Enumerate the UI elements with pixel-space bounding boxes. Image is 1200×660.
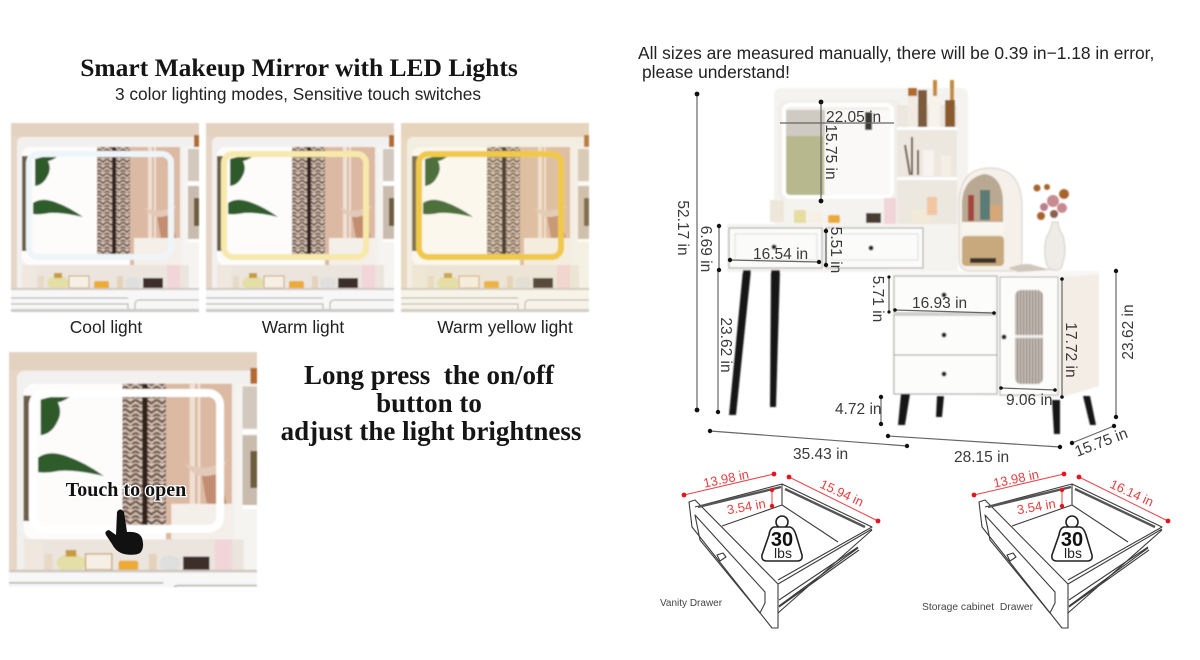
dimension labels: 35.43 in: [793, 446, 848, 463]
brightness instruction: [281, 360, 581, 446]
touch to open label: Touch to open: [66, 479, 186, 501]
photo: warm light mirror: [206, 123, 394, 312]
dimension labels: 4.72 in: [835, 401, 882, 418]
red dimensions: 15.94 in: [818, 476, 866, 509]
dimension labels: 9.06 in: [1006, 392, 1053, 409]
dimension labels: 23.62 in: [1120, 304, 1137, 360]
label: vanity drawer: Vanity Drawer: [660, 598, 723, 609]
dimension labels: 16.54 in: [753, 246, 808, 263]
dimension labels: [674, 109, 1137, 466]
vanity drawer diagram: [682, 466, 880, 628]
dimension labels: 17.72 in: [1062, 322, 1079, 378]
book on cabinet: [1008, 264, 1051, 272]
dimension labels: 52.17 in: [674, 200, 691, 256]
brightness instruction: button to: [376, 388, 482, 418]
red dimensions: 13.98 in: [702, 466, 750, 491]
furniture: vanity and storage cabinet: [727, 80, 1099, 434]
dimension end points: [695, 92, 1118, 449]
icon: 30 lbs weight: 30: [1061, 529, 1083, 551]
vanity legs: [729, 270, 780, 415]
icon: 30 lbs weight: lbs: [774, 545, 792, 561]
icon: 30 lbs weight: 30: [771, 529, 793, 551]
red dimensions: 16.14 in: [1108, 476, 1156, 509]
vanity desk with drawers: [727, 224, 958, 272]
photo: touch to open mirror: [9, 352, 257, 601]
dimension labels: 6.69 in: [697, 226, 714, 272]
storage cabinet: [892, 271, 1099, 398]
dimension labels: 15.75 in: [822, 124, 839, 180]
red dimensions: 3.54 in: [726, 496, 767, 517]
dimension labels: 5.51 in: [827, 227, 844, 273]
red dimensions: 13.98 in: [992, 466, 1040, 491]
subtitle: 3 color lighting modes, Sensitive touch switches: [115, 84, 481, 104]
desk-top cosmetics: [770, 198, 896, 224]
dimension labels: 23.62 in: [717, 317, 734, 373]
icon: 30 lbs weight: [1052, 516, 1092, 561]
caption: warm yellow light: Warm yellow light: [437, 317, 573, 337]
icon: 30 lbs weight: lbs: [1064, 545, 1082, 561]
red dimensions: 3.54 in: [1016, 496, 1057, 517]
storage cabinet drawer diagram: [972, 466, 1170, 628]
dimension labels: 15.75 in: [1073, 425, 1130, 461]
cabinet legs: [898, 394, 1096, 434]
vanity hutch: [774, 88, 968, 224]
icon: pointing hand: [105, 510, 143, 555]
dimension labels: 22.05 in: [826, 109, 881, 126]
arched cosmetic organizer: [959, 168, 1022, 271]
dimension lines: [697, 94, 1116, 447]
label: storage cabinet drawer: Storage cabinet Drawer: [922, 602, 1034, 613]
dimension labels: 28.15 in: [954, 449, 1009, 466]
red dimensions: [682, 466, 880, 523]
dimension labels: 5.71 in: [869, 276, 886, 322]
shelves with cosmetics: [897, 80, 957, 224]
vase with flowers: [1034, 184, 1069, 270]
red dimensions: [972, 466, 1170, 523]
brightness instruction: adjust the light brightness: [281, 416, 581, 446]
dimension labels: 16.93 in: [912, 295, 967, 312]
brightness instruction: Long press the on/off: [304, 360, 555, 390]
caption: cool light: Cool light: [70, 317, 142, 337]
measurement note: please understand!: [642, 62, 790, 82]
photo: cool light mirror: [11, 123, 199, 312]
title: Smart Makeup Mirror with LED Lights: [80, 53, 518, 82]
icon: 30 lbs weight: [762, 516, 802, 561]
measurement note: [638, 43, 1154, 82]
caption: warm light: Warm light: [262, 317, 344, 337]
measurement note: All sizes are measured manually, there will be 0.39 in−1.18 in error,: [638, 43, 1154, 63]
photo: warm yellow light mirror: [401, 123, 589, 312]
mirror: [778, 100, 900, 200]
